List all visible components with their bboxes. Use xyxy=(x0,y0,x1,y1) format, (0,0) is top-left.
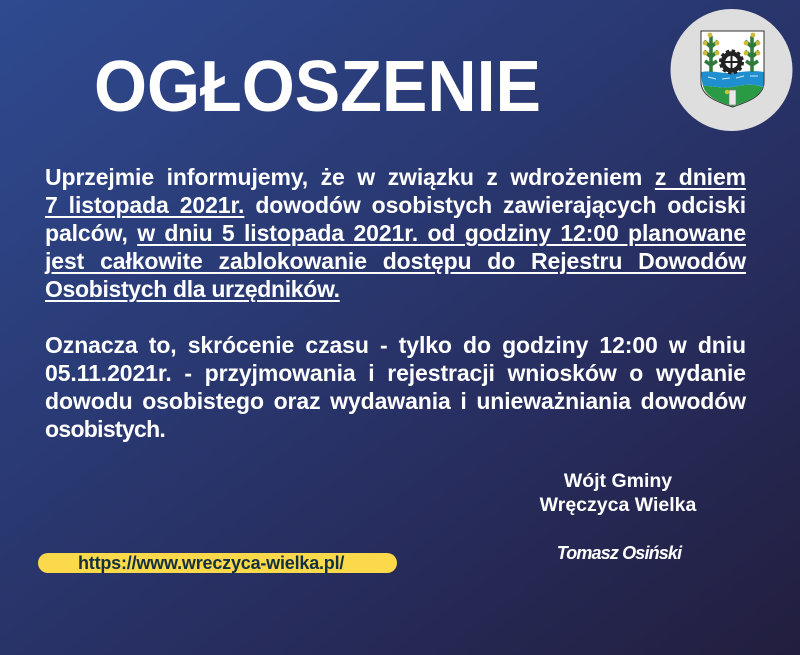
text block: notice body: osobistych. xyxy=(45,416,165,442)
signature: role: Wręczyca Wielka xyxy=(540,494,696,516)
signature: name: Tomasz Osiński xyxy=(557,543,681,563)
text block: notice body: Uprzejmie informujemy, że w związku z wdrożeniem z dniem xyxy=(45,164,746,190)
text block: notice body: palców, w dniu 5 listopada 2021r. od godziny 12:00 planowane xyxy=(45,220,746,246)
text block: notice body: Oznacza to, skrócenie czasu - tylko do godziny 12:00 w dniu xyxy=(45,332,746,358)
text block: notice body: dowodu osobistego oraz wydawania i unieważniania dowodów xyxy=(45,388,746,414)
text block: notice body xyxy=(44,164,746,442)
icon: municipal coat of arms in grey circle xyxy=(670,9,792,131)
text block: notice body: Osobistych dla urzędników. xyxy=(45,276,340,302)
text block: notice body: 05.11.2021r. - przyjmowania i rejestracji wniosków o wydanie xyxy=(45,360,746,386)
text block: notice body: jest całkowite zablokowanie dostępu do Rejestru Dowodów xyxy=(45,248,746,274)
text block: notice body: 7 listopada 2021r. dowodów osobistych zawierających odciski xyxy=(45,192,746,218)
website link pill: https://www.wreczyca-wielka.pl/ xyxy=(78,553,344,573)
signature: role xyxy=(540,470,696,516)
signature: role: Wójt Gminy xyxy=(564,470,672,492)
